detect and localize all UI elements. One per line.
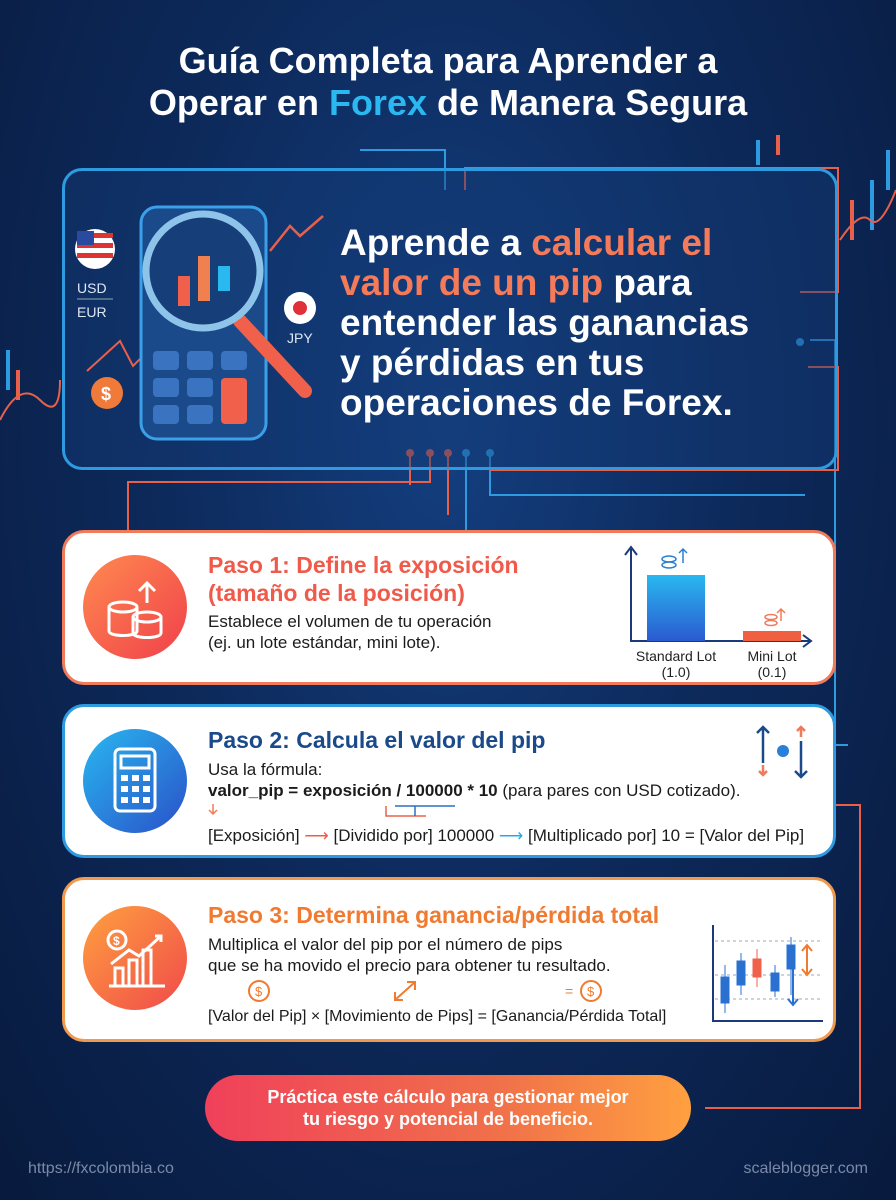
headline text: operaciones de Forex. [340,382,733,423]
bar chart: lots: Standard Lot [636,648,716,664]
title: Guía Completa para Aprender a [179,40,717,81]
text: (ej. un lote estándar, mini lote). [208,633,440,652]
headline text: y pérdidas en tus [340,342,644,383]
bar chart: lots: (1.0) [662,664,690,680]
icon: growth chart: $ [113,934,120,948]
text: Establece el volumen de tu operación [208,612,492,631]
title: Operar en Forex de Manera Segura [149,82,747,123]
headline text: entender las ganancias [340,302,749,343]
text: que se ha movido el precio para obtener tu resultado. [208,956,611,975]
formula text: Usa la fórmula: [208,760,322,779]
icons: dollar, arrow: = [565,983,573,999]
text [208,612,492,652]
icon: up/down arrows [756,725,808,779]
headline text: valor de un pip para [340,262,692,303]
footer right: scaleblogger.com [743,1160,868,1177]
heading: Paso 2: Calcula el valor del pip [208,727,545,753]
illustration: calculator with magnifier: JPY [287,330,313,346]
callout: practice: tu riesgo y potencial de beneficio. [303,1109,593,1129]
text [208,935,611,975]
illustration: calculator with magnifier [75,206,324,440]
icons: dollar, arrow [248,980,602,1002]
heading: (tamaño de la posición) [208,580,465,606]
candlestick chart [712,925,823,1022]
icon: growth chart [83,906,187,1010]
bar chart: lots: (0.1) [758,664,786,680]
card: paso 2 [62,704,836,858]
footer left: https://fxcolombia.co [28,1160,174,1177]
card: paso 3 [62,877,836,1042]
callout: practice [205,1075,691,1141]
formula flow: [Exposición] ⟶ [Dividido por] 100000 ⟶ [Multiplicado por] 10 = [Valor del Pip] [208,826,804,845]
formula text: valor_pip = exposición / 100000 * 10 (para pares con USD cotizado). [208,781,740,800]
heading: Paso 3: Determina ganancia/pérdida total [208,902,659,928]
icon: coins [83,555,187,659]
illustration: calculator with magnifier: USD [77,280,107,296]
text: Multiplica el valor del pip por el número de pips [208,935,562,954]
headline text: Aprende a calcular el [340,222,712,263]
headline text [340,222,749,423]
icon: calculator [83,729,187,833]
bar chart: lots [624,546,812,680]
heading: Paso 1: Define la exposición [208,552,519,578]
illustration: calculator with magnifier: $ [101,384,111,404]
bar chart: lots: Mini Lot [747,648,797,664]
icons: dollar, arrow: $ [587,984,595,999]
card: paso 1 [62,530,836,685]
icons: dollar, arrow: $ [255,984,263,999]
formula: [Valor del Pip] × [Movimiento de Pips] = [Ganancia/Pérdida Total] [208,1008,666,1025]
illustration: calculator with magnifier: EUR [77,304,107,320]
callout: practice: Práctica este cálculo para gestionar mejor [267,1087,629,1107]
title [149,40,748,123]
formula text [208,760,740,800]
panel: intro [62,168,838,470]
heading [208,552,519,606]
